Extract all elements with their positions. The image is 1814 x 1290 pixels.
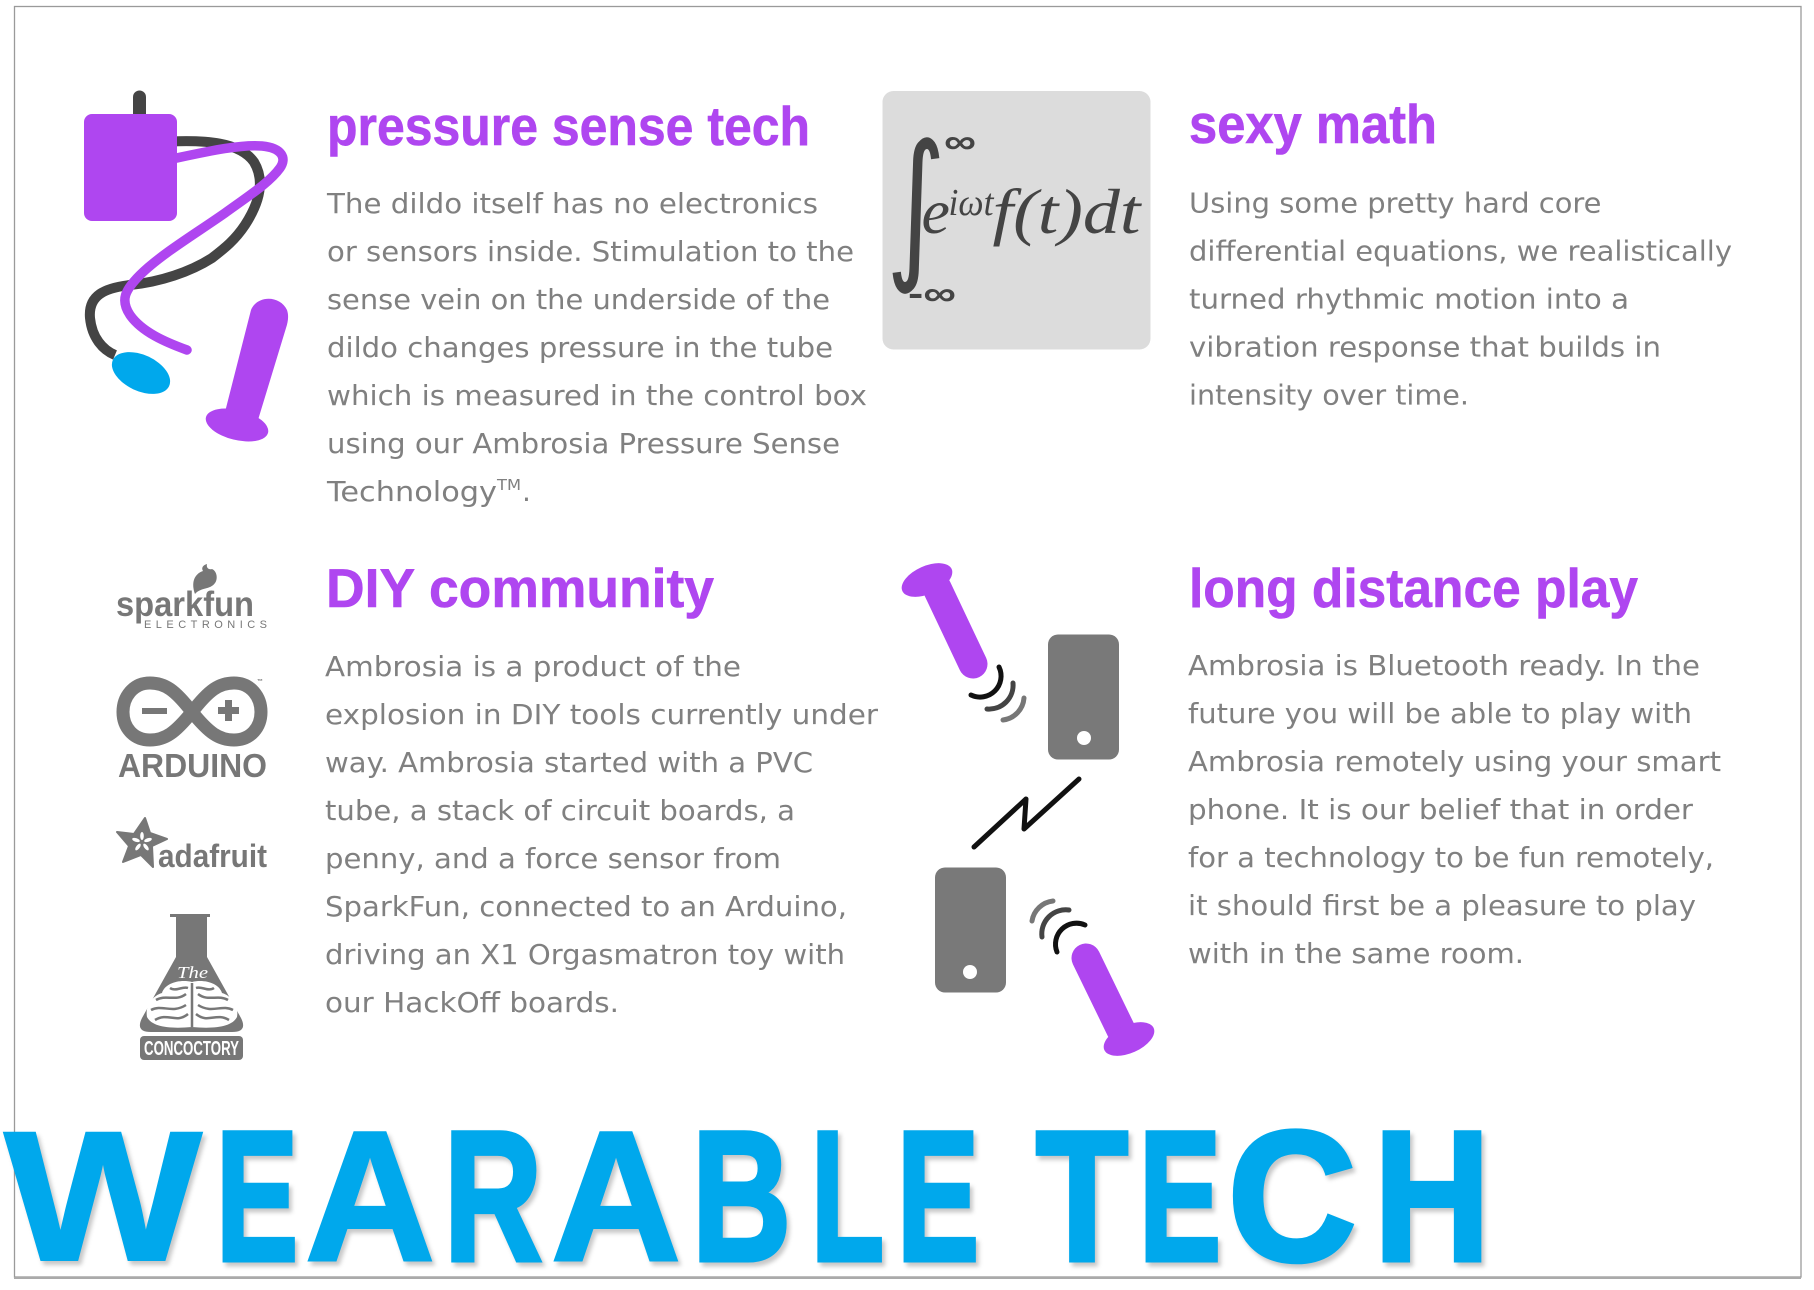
body text: explosion in DIY tools currently under	[325, 698, 879, 731]
body text: or sensors inside. Stimulation to the	[327, 235, 854, 268]
logo: sparkfun: sparkfun	[116, 585, 254, 624]
logo: adafruit	[117, 818, 267, 874]
body text: Using some pretty hard core	[1189, 186, 1602, 220]
body text: turned rhythmic motion into a	[1189, 282, 1629, 316]
logo: adafruit: adafruit	[158, 838, 267, 874]
body text: SparkFun, connected to an Arduino,	[325, 890, 847, 923]
logo: arduino	[118, 678, 267, 784]
body text: future you will be able to play with	[1188, 697, 1692, 730]
body text: using our Ambrosia Pressure Sense	[327, 427, 840, 460]
body text: Ambrosia remotely using your smart	[1188, 745, 1721, 778]
formula box: f(t)dt	[992, 176, 1143, 247]
logo: the concoctory	[140, 914, 243, 1060]
body text: which is measured in the control box	[327, 379, 867, 412]
body text: The dildo itself has no electronics	[326, 187, 818, 220]
body text: tube, a stack of circuit boards, a	[325, 794, 795, 827]
panel: pressure sense tech	[84, 95, 876, 508]
panel: long distance play	[897, 556, 1730, 1063]
icon: remote play devices	[897, 556, 1159, 1063]
body text: it should first be a pleasure to play	[1188, 889, 1696, 922]
body text: way. Ambrosia started with a PVC	[325, 746, 813, 779]
heading: DIY community	[326, 557, 714, 619]
body text: Ambrosia is a product of the	[325, 650, 741, 683]
body text: vibration response that builds in	[1189, 330, 1661, 364]
body text: Ambrosia is Bluetooth ready. In the	[1188, 649, 1700, 682]
heading: long distance play	[1189, 557, 1638, 619]
body text: .	[522, 475, 531, 508]
formula box: iωt	[948, 182, 995, 224]
heading: pressure sense tech	[327, 95, 810, 157]
formula box	[882, 91, 1150, 350]
body text: driving an X1 Orgasmatron toy with	[325, 938, 845, 971]
icon: control box, tube and dildo	[84, 97, 288, 447]
formula box: -∞	[908, 275, 956, 313]
formula box: ∫	[886, 111, 946, 299]
panel: DIY community	[116, 557, 887, 1060]
logo: arduino: ™	[257, 678, 263, 685]
logo: arduino: ARDUINO	[118, 747, 267, 784]
body text: with in the same room.	[1188, 937, 1524, 970]
logo: sparkfun	[116, 564, 267, 631]
formula box: ∞	[944, 123, 976, 161]
logo: the concoctory: CONCOCTORY	[144, 1038, 239, 1060]
body text: TM	[496, 476, 521, 494]
logo: the concoctory: The	[177, 963, 209, 982]
body text: differential equations, we realistically	[1189, 234, 1732, 268]
heading: sexy math	[1189, 93, 1437, 155]
body text: dildo changes pressure in the tube	[327, 331, 833, 364]
body text: penny, and a force sensor from	[325, 842, 781, 875]
body text: sense vein on the underside of the	[327, 283, 830, 316]
panel: sexy math	[882, 91, 1741, 412]
body text: Technology	[326, 475, 497, 508]
body text: intensity over time.	[1189, 378, 1469, 412]
logo: sparkfun: ELECTRONICS	[144, 619, 267, 631]
formula box: e	[922, 176, 950, 247]
body text: our HackOff boards.	[325, 986, 619, 1019]
body text: for a technology to be fun remotely,	[1188, 841, 1714, 874]
body text: phone. It is our belief that in order	[1188, 793, 1694, 826]
